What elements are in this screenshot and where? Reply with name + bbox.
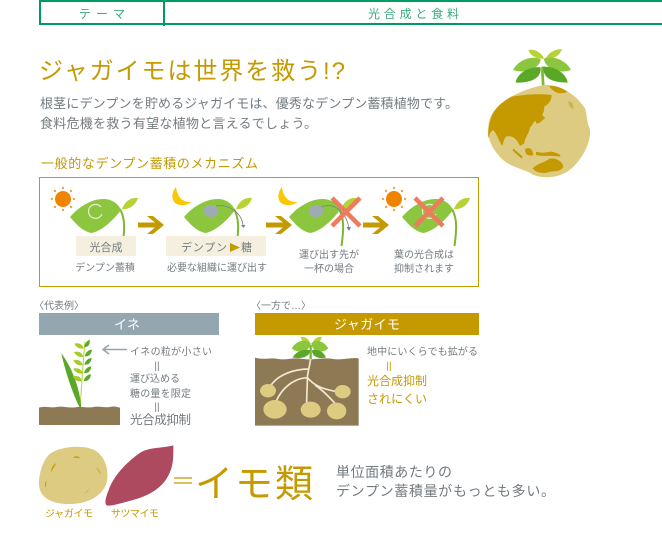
panel: potato xyxy=(251,299,479,426)
label: on the other hand: 〈一方で…〉 xyxy=(251,299,311,312)
icon: potato globe with sprout xyxy=(488,49,590,177)
step 2: starch to sugar: デンプン xyxy=(181,240,227,254)
heading: tubers: イモ類 xyxy=(195,464,313,506)
panel: potato: || xyxy=(386,361,392,372)
conclusion text xyxy=(336,464,555,499)
arrow xyxy=(363,216,389,234)
heading: starch storage mechanism: 一般的なデンプン蓄積のメカニズム xyxy=(41,156,258,171)
arrow xyxy=(138,216,164,234)
intro text xyxy=(40,96,458,131)
step 2: starch to sugar xyxy=(166,187,267,274)
potato header xyxy=(255,313,479,335)
equals sign xyxy=(174,478,192,483)
rice explanation text xyxy=(130,345,212,427)
arrow: pointing to rice grain xyxy=(103,345,127,354)
panel: mechanism xyxy=(40,178,478,286)
step 3: destination full xyxy=(278,187,360,275)
step 1: photosynthesis xyxy=(51,187,138,274)
arrow xyxy=(266,216,292,234)
panel: rice xyxy=(34,299,219,427)
rice header: イネ xyxy=(114,317,140,332)
step 1: photosynthesis: 光合成 xyxy=(90,240,122,254)
label: sweet potato: サツマイモ xyxy=(111,508,159,520)
icon: potato xyxy=(39,447,108,520)
conclusion text: デンプン蓄積量がもっとも多い。 xyxy=(336,483,555,499)
icon: potato plant underground xyxy=(255,337,359,426)
rice header xyxy=(39,313,219,335)
intro text: 根茎にデンプンを貯めるジャガイモは、優秀なデンプン蓄積植物です。 xyxy=(40,96,458,111)
rice explanation text: 糖の量を限定 xyxy=(130,387,191,400)
step 2: starch to sugar: 糖 xyxy=(241,241,252,254)
step 2: starch to sugar: 必要な組織に運び出す xyxy=(167,261,267,274)
icon: sweet potato xyxy=(105,445,173,520)
label: representative example: 〈代表例〉 xyxy=(34,299,84,312)
intro text: 食料危機を救う有望な植物と言えるでしょう。 xyxy=(40,116,317,131)
conclusion text: 単位面積あたりの xyxy=(336,464,452,480)
rice explanation text: 運び込める xyxy=(130,373,180,385)
title: ジャガイモは世界を救う!? xyxy=(39,58,345,85)
potato explanation text: 地中にいくらでも拡がる xyxy=(367,345,478,358)
step 3: destination full: 一杯の場合 xyxy=(304,262,354,275)
step 4: photosynthesis suppressed: 抑制されます xyxy=(394,262,454,275)
header bar xyxy=(40,0,662,26)
icon: rice plant with soil xyxy=(39,340,120,425)
panel: potato: されにくい xyxy=(367,392,427,406)
header label: topic: 光合成と食料 xyxy=(368,7,459,21)
label: potato: ジャガイモ xyxy=(45,508,93,520)
rice explanation text: || xyxy=(154,402,160,413)
rice explanation text: イネの粒が小さい xyxy=(130,345,212,358)
potato header: ジャガイモ xyxy=(334,317,400,332)
rice explanation text: || xyxy=(154,361,160,372)
step 4: photosynthesis suppressed xyxy=(382,187,470,275)
step 3: destination full: 運び出す先が xyxy=(299,248,359,261)
step 4: photosynthesis suppressed: 葉の光合成は xyxy=(394,248,454,261)
panel: potato: 光合成抑制 xyxy=(367,374,427,388)
header label: theme: テーマ xyxy=(79,7,125,21)
rice explanation text: 光合成抑制 xyxy=(130,413,191,427)
step 1: photosynthesis: デンプン蓄積 xyxy=(75,261,135,274)
